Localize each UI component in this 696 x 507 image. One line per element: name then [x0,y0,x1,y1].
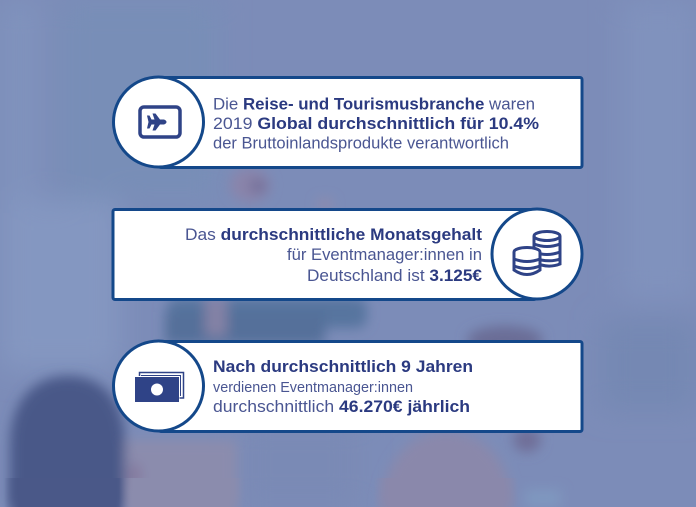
icon circle [492,209,582,299]
panel text: Nach durchschnittlich 9 Jahren [213,358,473,376]
icon: banknotes [135,372,184,402]
icon: airplane ticket [140,107,180,137]
panel text: Deutschland ist 3.125€ [307,267,482,285]
panel text: 2019 Global durchschnittlich für 10.4% [213,115,539,133]
icon circle [114,341,204,431]
panel: tourism share [114,77,582,168]
panel text: für Eventmanager:innen in [287,246,482,264]
panel text: Die Reise- und Tourismusbranche waren [213,96,535,114]
panel text: verdienen Eventmanager:innen [213,379,413,396]
icon circle [114,77,204,167]
panel text: durchschnittlich 46.270€ jährlich [213,398,470,416]
panel text: der Bruttoinlandsprodukte verantwortlich [213,134,509,152]
panel text [213,358,473,416]
panel background [159,78,582,168]
panel background [113,210,536,300]
panel: monthly salary [113,209,582,300]
panel background [159,342,582,432]
panel: yearly salary [114,341,582,432]
icon: coin stacks [514,232,560,274]
panel text [213,96,539,152]
panel text: Das durchschnittliche Monatsgehalt [185,226,483,244]
panel text [185,226,483,285]
